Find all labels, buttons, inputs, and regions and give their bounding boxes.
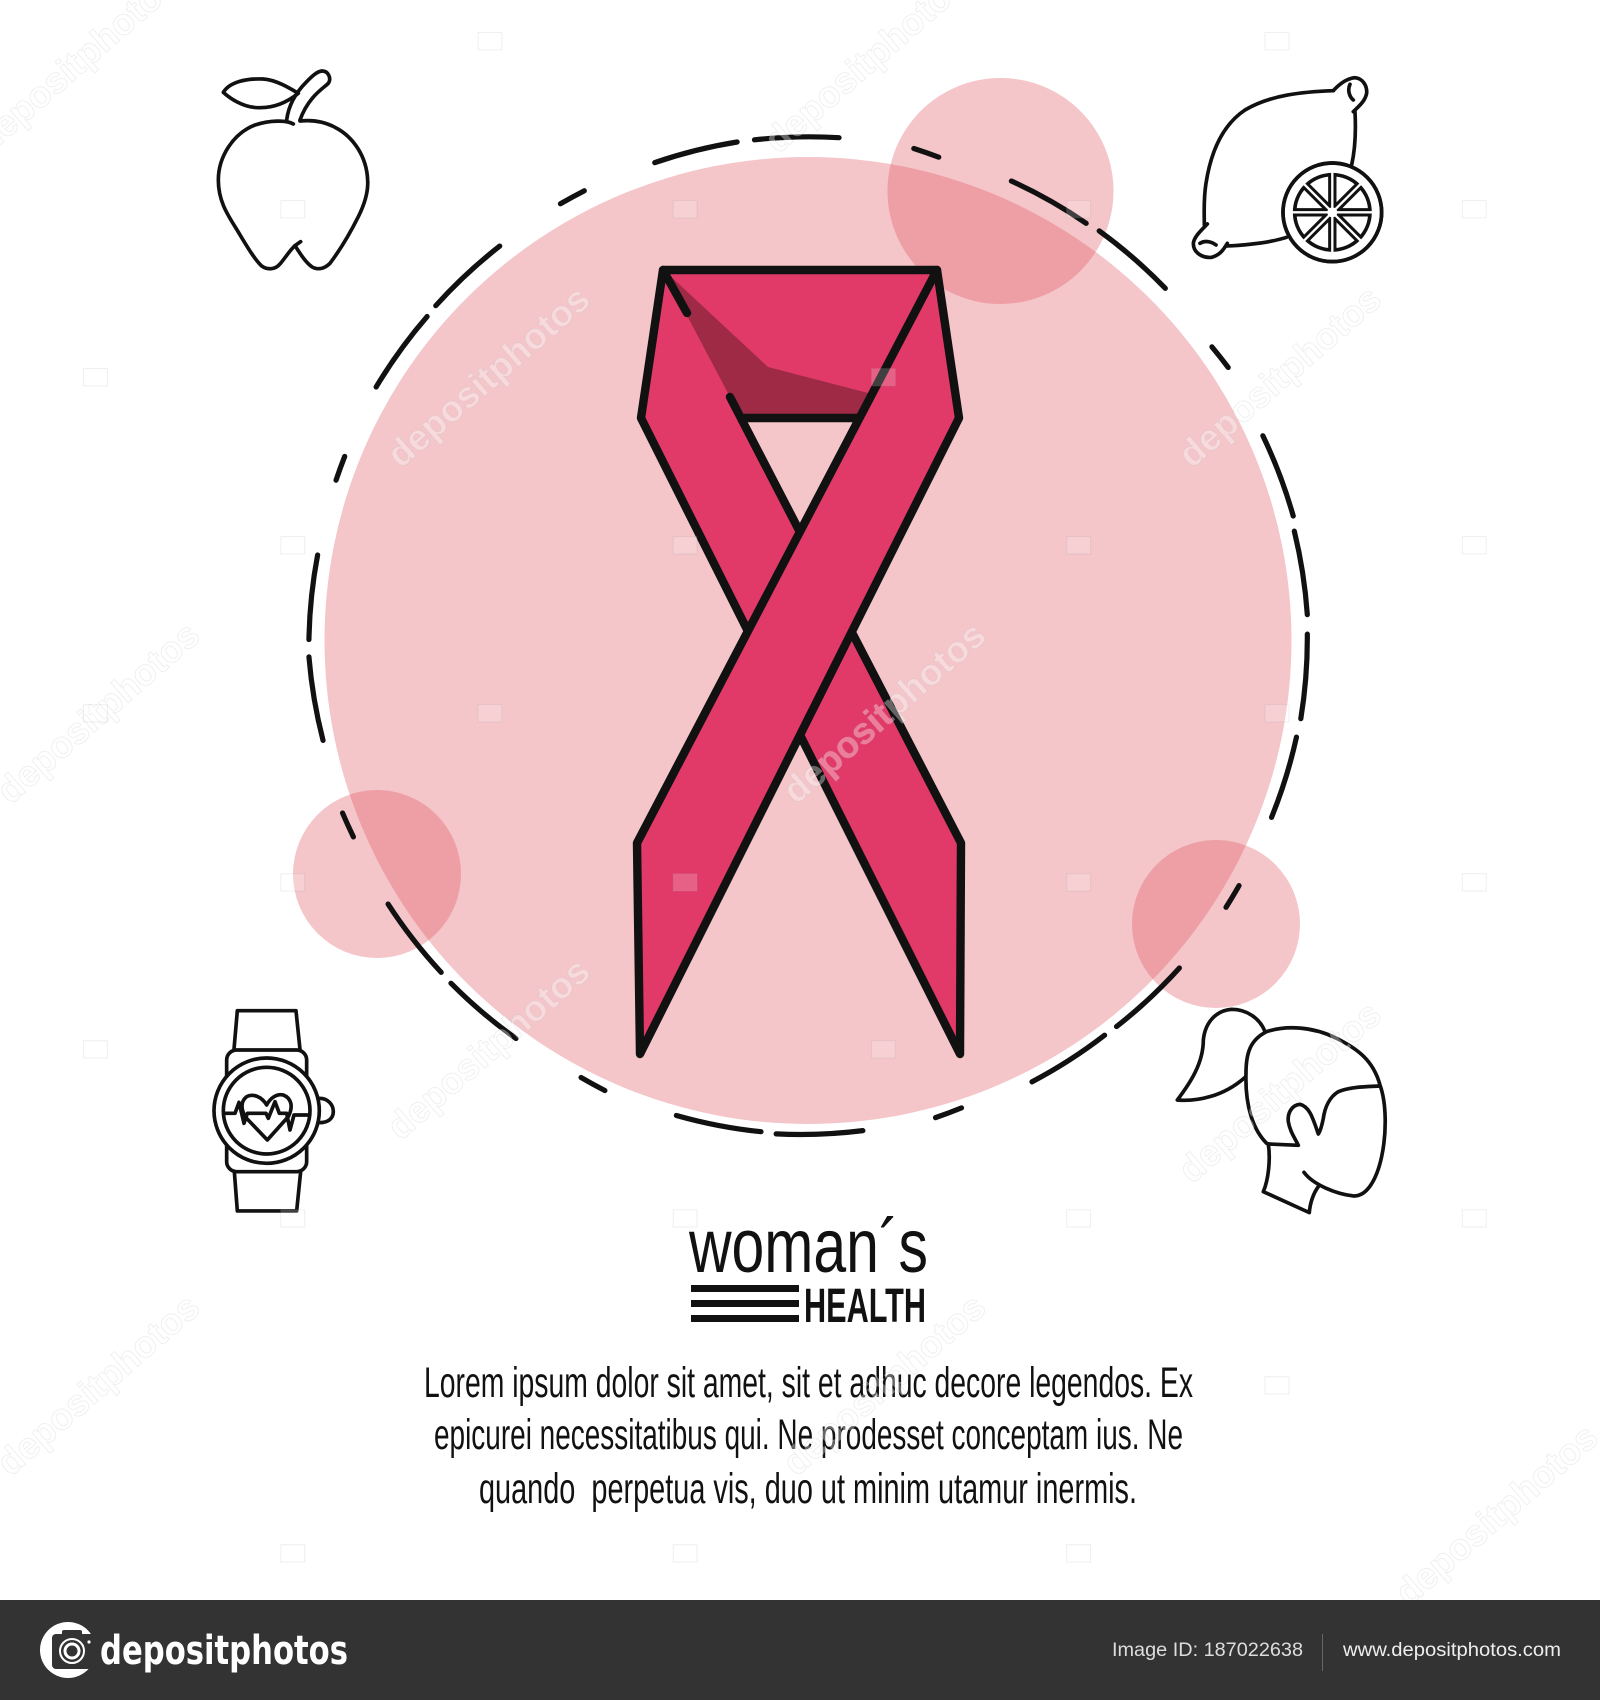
body text: quando perpetua vis, duo ut minim utamur inermis. — [479, 1465, 1137, 1513]
ribbon back band — [641, 270, 961, 1054]
image id: Image ID: 187022638 — [1112, 1639, 1303, 1661]
icon: apple — [218, 71, 368, 269]
main pink circle — [324, 157, 1292, 1124]
title: bars and HEALTH: HEALTH — [804, 1280, 926, 1333]
website: www.depositphotos.com — [1342, 1639, 1561, 1661]
body text: epicurei necessitatibus qui. Ne prodesset conceptam ius. Ne — [434, 1411, 1183, 1459]
icon: woman's head — [1177, 1009, 1385, 1213]
footer bar — [0, 1600, 1600, 1700]
watermarks: depositphotos — [1170, 278, 1389, 475]
body text — [424, 1359, 1193, 1513]
title: woman's: woman´s — [688, 1204, 928, 1289]
watermarks: depositphotos — [1170, 993, 1389, 1191]
title: bars and HEALTH — [691, 1280, 926, 1333]
logo wordmark: depositphotos — [100, 1628, 348, 1674]
ribbon fold shadow — [666, 272, 868, 418]
watermarks: depositphotos — [379, 950, 597, 1147]
dashed ring — [309, 137, 1307, 1134]
ribbon front band — [637, 270, 959, 1054]
awareness ribbon — [637, 270, 961, 1054]
ribbon back outlines — [641, 270, 961, 1054]
watermarks: depositphotos — [775, 614, 993, 811]
icon: heart-rate watch — [214, 1011, 333, 1211]
ribbon top fold — [663, 270, 937, 418]
icon: lemon — [1193, 78, 1382, 262]
small overlapping circles — [293, 78, 1300, 1008]
watermarks: depositphotos — [1387, 1416, 1600, 1613]
icon: camera logo — [40, 1622, 96, 1678]
watermark camera marks — [83, 33, 1486, 1562]
watermarks: depositphotos — [379, 278, 597, 475]
body text: Lorem ipsum dolor sit amet, sit et adhuc decore legendos. Ex — [424, 1359, 1193, 1407]
watermarks: depositphotos — [775, 1286, 993, 1483]
